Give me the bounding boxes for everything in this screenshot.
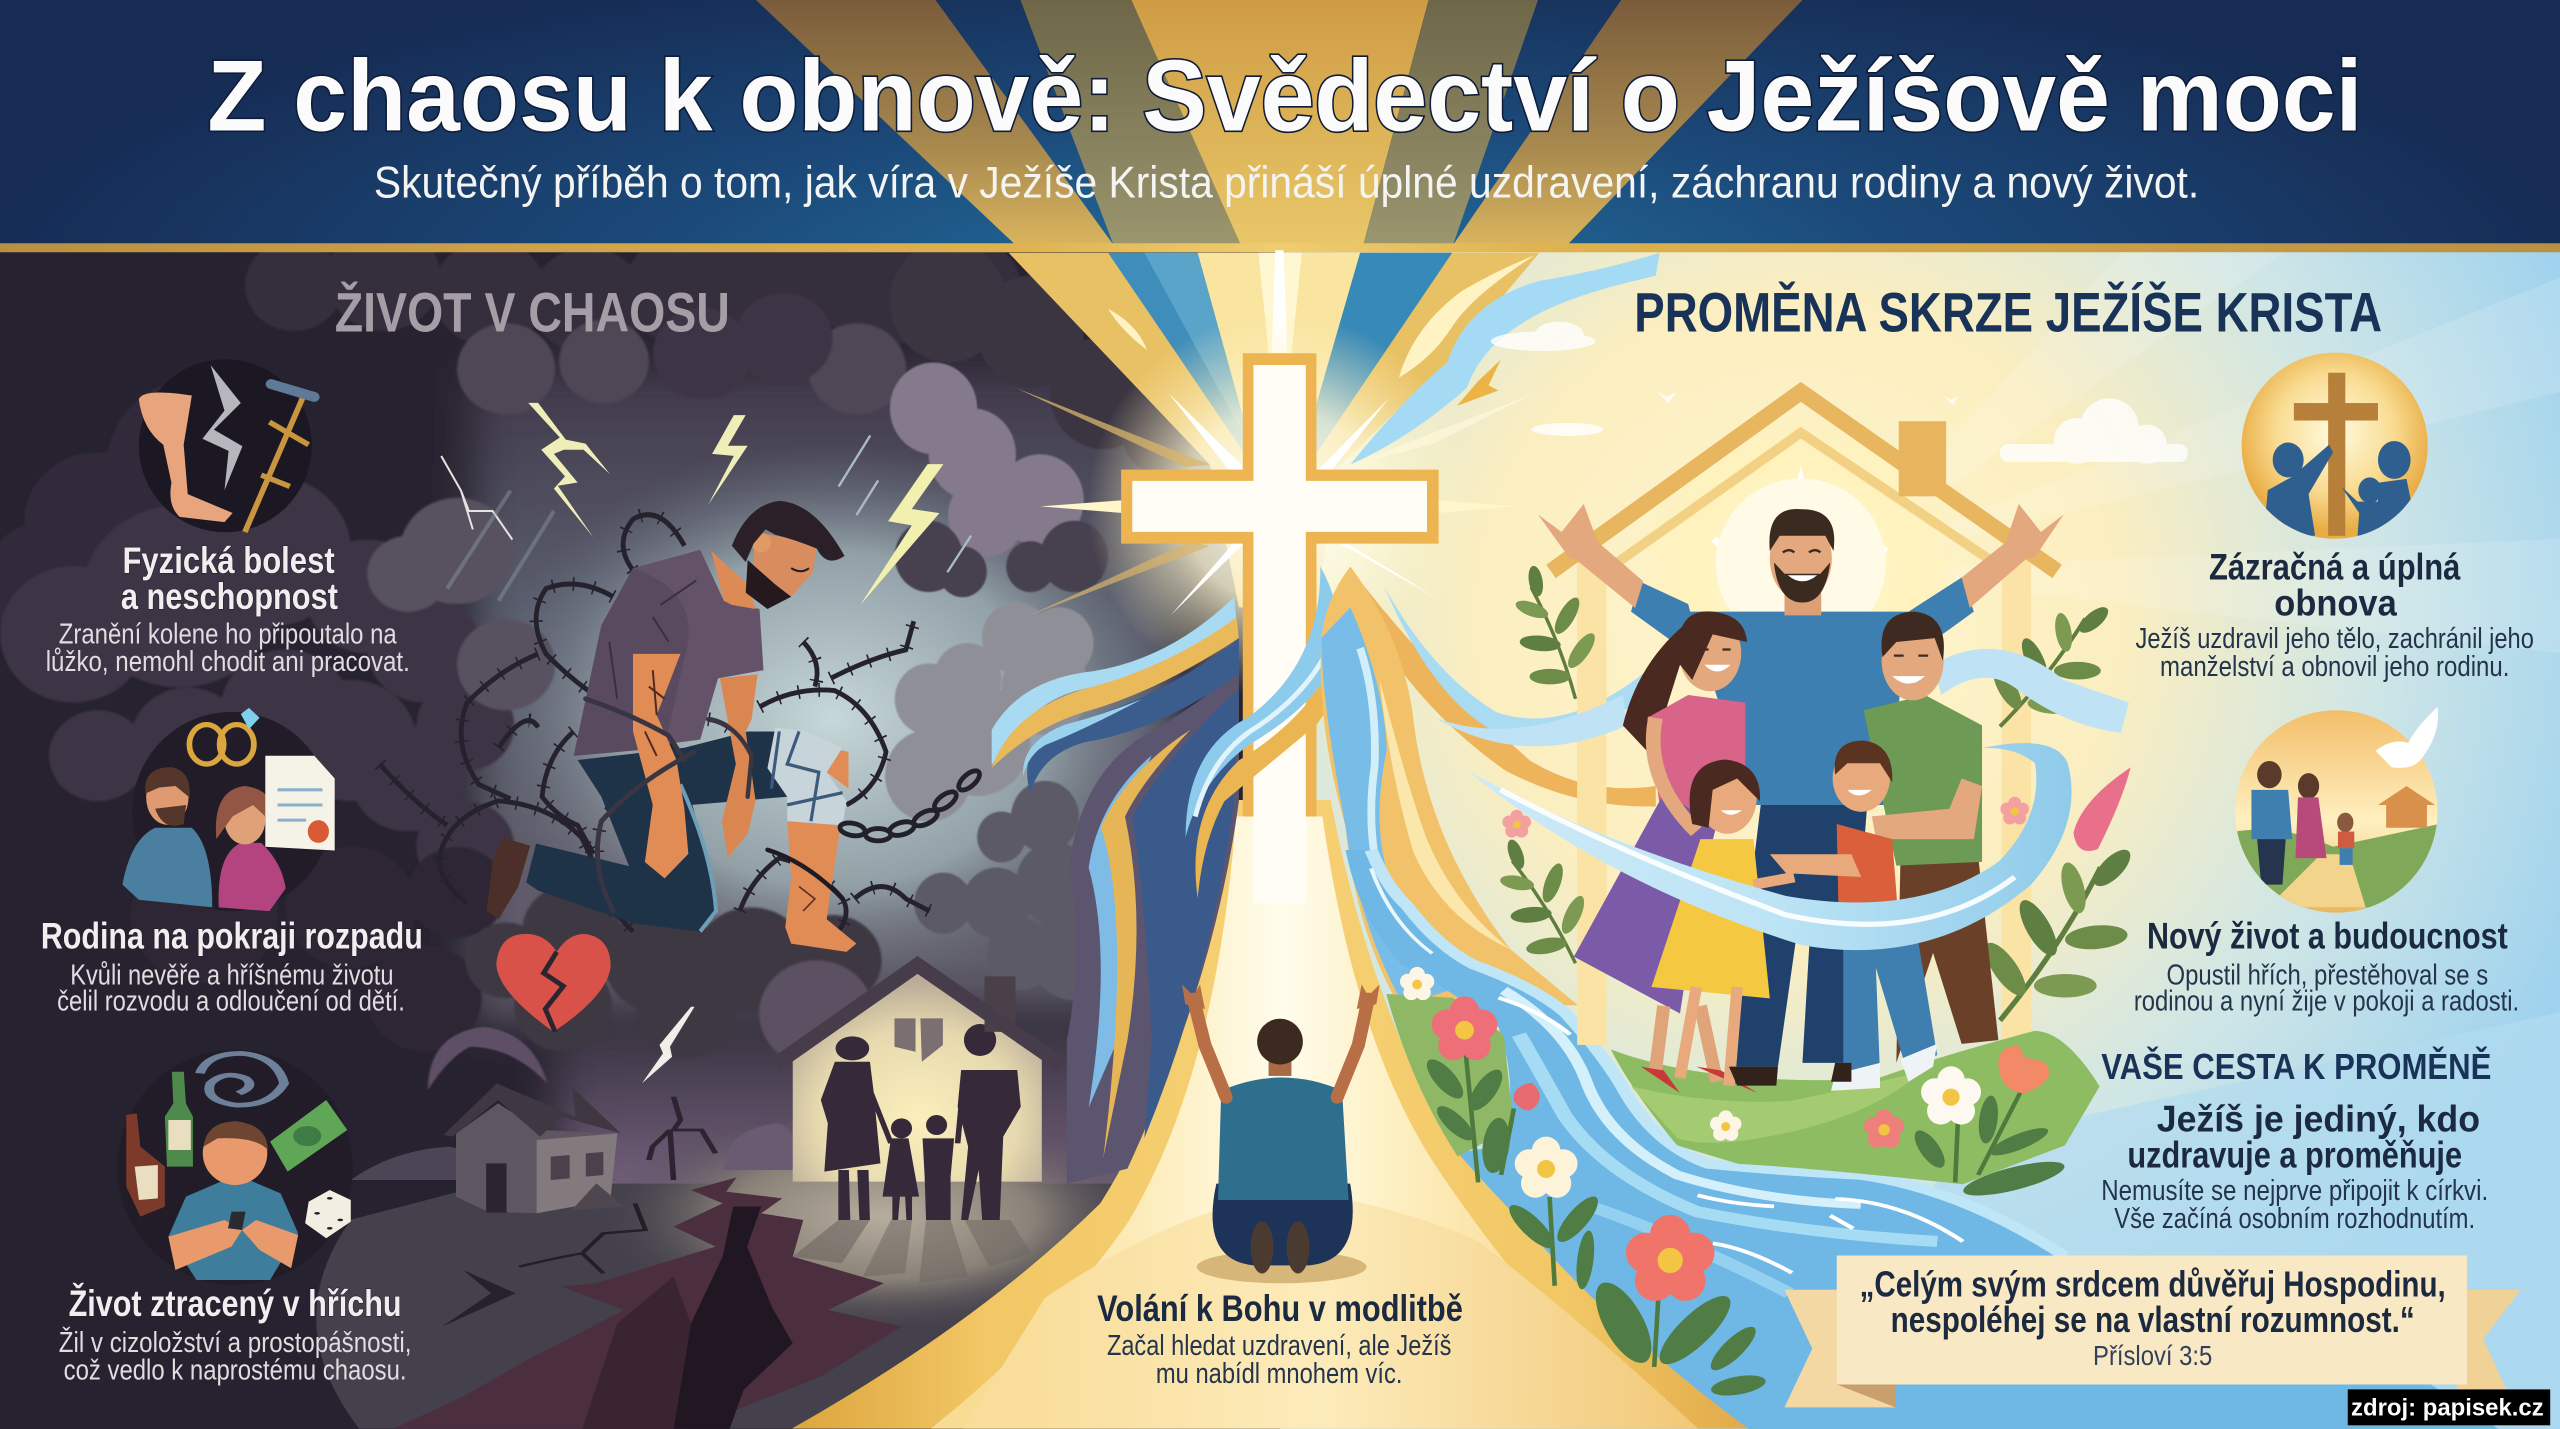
illustration: restored family (1538, 504, 2064, 1093)
shadows of family (793, 1220, 870, 1263)
banner: Bible quote: „Celým svým srdcem důvěřuj Hospodinu, (1860, 1263, 2446, 1304)
ribbon around family (1468, 743, 2072, 950)
subtitle: Skutečný příběh o tom, jak víra v Ježíše Krista přináší úplné uzdravení, záchranu rodiny a nový život. (374, 159, 2199, 208)
calf and foot (785, 821, 856, 952)
back arm (720, 674, 758, 858)
text block: miraculous restoration (2136, 547, 2534, 683)
text block: your path to transformation (2101, 1046, 2491, 1235)
central light: lower beam (792, 800, 1749, 1429)
title: Z chaosu k obnově: Svědectví o Ježíšově moci (207, 40, 2362, 153)
illustration: bright house behind family (1551, 392, 2057, 1045)
text block: miraculous restoration: Zázračná a úplná (2209, 547, 2461, 588)
panel: title banner background with rays (0, 0, 2560, 252)
text block: your path to transformation: VAŠE CESTA K PROMĚNĚ (2101, 1046, 2491, 1087)
flowing ribbons from cross, left side (992, 597, 1239, 1184)
text block: life lost in sin (59, 1282, 411, 1387)
bandage (767, 727, 847, 825)
central light: upper wedges of gold and blue (1009, 250, 1539, 607)
banner: Bible quote: nespoléhej se na vlastní rozumnost.“ (1891, 1299, 2415, 1340)
woman (1574, 611, 1758, 1093)
panel: left side, life in chaos background (0, 225, 1306, 1429)
text block: prayer: mu nabídl mnohem víc. (1156, 1358, 1402, 1390)
decorative clouds and birds on the right (1491, 322, 2188, 464)
upper ribbon behind family (1435, 649, 2129, 746)
icon: healing, cross and family silhouettes in sun (2242, 353, 2428, 540)
illustration: family house with silhouettes (793, 958, 1042, 1220)
text block: physical pain: Zranění kolene ho připoutalo na (59, 618, 397, 650)
icon: chain (839, 767, 983, 841)
olive branches around family (1466, 551, 2171, 1058)
girl (1651, 759, 1794, 1086)
text block: your path to transformation: Nemusíte se nejprve připojit k církvi. (2101, 1175, 2488, 1207)
thorns wrapped in front of the man (586, 699, 843, 911)
distant cloud (723, 1123, 795, 1170)
text block: prayer: Volání k Bohu v modlitbě (1097, 1288, 1463, 1329)
text block: physical pain: Fyzická bolest (122, 540, 335, 581)
curl cloud (428, 1027, 547, 1090)
illustration: kneeling man bound by thorns (487, 501, 856, 952)
boot (487, 838, 530, 919)
text block: prayer: Začal hledat uzdravení, ale Ježíš (1107, 1330, 1451, 1362)
icon: lightning bolts (441, 403, 971, 605)
illustration: ruined house (443, 1083, 624, 1213)
icon: new life, walking family with dove (2235, 707, 2439, 913)
house roof peak and chimney (776, 965, 1061, 1064)
text block: physical pain (46, 540, 410, 678)
text block: new life and future (2134, 916, 2519, 1018)
heading: life in chaos: ŽIVOT V CHAOSU (335, 281, 730, 343)
source label: zdroj: papisek.cz (2351, 1395, 2544, 1422)
icon: family breakdown, rings, couple and document (122, 708, 335, 911)
text block: family on the brink (41, 916, 423, 1018)
flowers and plants on the river bank (1386, 767, 2131, 1399)
face (754, 531, 817, 597)
text block: your path to transformation: Ježíš je jediný, kdo (2157, 1098, 2480, 1139)
shirt (574, 550, 763, 756)
light rays around cross (1016, 388, 1535, 615)
banner: Bible quote: Přísloví 3:5 (2093, 1340, 2212, 1371)
glow behind the cross (1087, 313, 1473, 699)
icon: broken heart (496, 934, 611, 1032)
beard (746, 560, 791, 609)
illustration: meadow under the family (1611, 1031, 2100, 1184)
text block: life lost in sin: Žil v cizoložství a prostopášnosti, (59, 1326, 411, 1359)
text block: life lost in sin: což vedlo k naprostému chaosu. (64, 1355, 407, 1387)
flowing ribbons crossing the cross (1186, 567, 1349, 898)
boy (1770, 741, 1937, 1091)
icon: glowing cross (1121, 353, 1439, 903)
river flowing from cross to the right (1321, 567, 2499, 1429)
neck (711, 551, 756, 609)
text block: family on the brink: čelil rozvodu a odloučení od dětí. (57, 986, 405, 1018)
heading: transformation through Jesus: PROMĚNA SKRZE JEŽÍŠE KRISTA (1634, 281, 2382, 343)
text block: miraculous restoration: obnova (2274, 583, 2397, 624)
jeans (526, 731, 787, 931)
banner: Bible quote (1784, 1256, 2521, 1407)
text block: physical pain: lůžko, nemohl chodit ani pracovat. (46, 646, 410, 678)
blue ribbon at upper right of cross (1350, 253, 1660, 464)
text block: your path to transformation: Vše začíná osobním rozhodnutím. (2114, 1203, 2475, 1235)
text block: family on the brink: Rodina na pokraji rozpadu (41, 916, 423, 957)
illustration: thorns behind and around the man (380, 515, 930, 944)
icon: sinful life, man with bottles, money and dice (118, 1050, 353, 1285)
text block: physical pain: a neschopnost (121, 576, 338, 617)
hair (732, 501, 845, 562)
text block: family on the brink: Kvůli nevěře a hříšnému životu (70, 959, 393, 991)
text block: prayer (1097, 1288, 1463, 1390)
front arm (633, 654, 688, 878)
young man (1864, 612, 1998, 1063)
illustration: man praying on his knees (1182, 984, 1380, 1283)
central father (1538, 504, 2064, 1067)
text block: your path to transformation: uzdravuje a proměňuje (2127, 1134, 2462, 1175)
icon: pain, leg and crutch (139, 359, 314, 532)
panel: right side, transformation background (1280, 251, 2560, 1429)
text block: new life and future: Opustil hřích, přestěhoval se s (2167, 959, 2488, 991)
crack (393, 1177, 901, 1429)
text block: life lost in sin: Život ztracený v hříchu (69, 1282, 402, 1324)
illustration: ground crack and lower landscape (351, 1007, 1031, 1429)
skin above knee (827, 748, 849, 789)
